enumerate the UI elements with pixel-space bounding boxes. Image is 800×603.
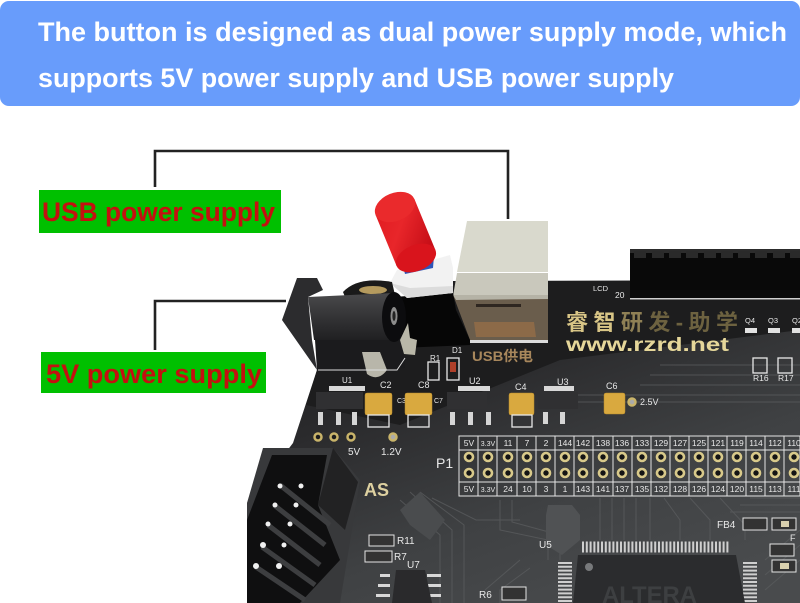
pin header table xyxy=(459,436,800,496)
AS connector label: AS xyxy=(364,480,389,500)
capacitor pads xyxy=(368,358,792,427)
pin numbers bottom: 124 xyxy=(711,484,725,494)
silkscreen labels: F xyxy=(790,533,796,543)
label: USB power supply xyxy=(39,190,281,233)
silkscreen labels: C6 xyxy=(606,381,618,391)
SMD resistors xyxy=(365,328,800,600)
silkscreen labels: LCD xyxy=(593,284,609,293)
pin holes xyxy=(465,453,798,477)
pin numbers top: 133 xyxy=(635,438,649,448)
pin numbers top: 5V xyxy=(464,438,475,448)
pin numbers top: 138 xyxy=(596,438,610,448)
label: USB power supply: USB power supply xyxy=(42,197,275,227)
button base xyxy=(390,255,453,298)
USB connector xyxy=(453,221,548,343)
circuit board photo xyxy=(247,186,800,603)
hatched copper areas xyxy=(546,505,580,555)
silkscreen labels: 1.2V xyxy=(381,447,402,458)
U7 IC xyxy=(376,570,441,603)
silkscreen labels: R11 xyxy=(397,536,415,547)
silkscreen labels: U1 xyxy=(342,376,353,385)
silkscreen labels: U3 xyxy=(557,377,569,387)
pin numbers top xyxy=(464,438,800,448)
copper traces xyxy=(400,365,800,603)
label: 5V power supply: 5V power supply xyxy=(46,359,262,389)
silkscreen labels: R6 xyxy=(479,590,492,601)
silkscreen labels: 2.5V xyxy=(640,397,659,407)
silkscreen labels: R1 xyxy=(430,354,441,363)
button stem xyxy=(403,256,434,274)
silkscreen labels: C7 xyxy=(434,398,443,405)
silkscreen labels: D1 xyxy=(452,346,463,355)
pin numbers top: 125 xyxy=(692,438,706,448)
pin numbers bottom: 3 xyxy=(544,484,549,494)
heading text: The button is designed as dual power supply mode, which xyxy=(38,17,787,47)
silkscreen labels: 20 xyxy=(615,290,625,300)
pin numbers top: 112 xyxy=(768,438,782,448)
pin numbers bottom: 126 xyxy=(692,484,706,494)
DC jack xyxy=(282,278,417,377)
pin numbers top: 3.3V xyxy=(481,441,496,448)
connector line: 5V xyxy=(155,301,286,350)
pin numbers top: 136 xyxy=(615,438,629,448)
LCD header connector xyxy=(630,249,800,300)
pin numbers top: 129 xyxy=(654,438,668,448)
silkscreen labels: C4 xyxy=(515,382,527,392)
silkscreen labels: U5 xyxy=(539,540,552,551)
silkscreen labels: C8 xyxy=(418,380,430,390)
pin numbers bottom: 115 xyxy=(749,484,763,494)
pin numbers bottom: 1 xyxy=(563,484,568,494)
silkscreen labels: P1 xyxy=(436,455,453,471)
pin numbers bottom: 143 xyxy=(576,484,590,494)
pin numbers bottom: 3.3V xyxy=(481,487,496,494)
pin numbers bottom: 141 xyxy=(596,484,610,494)
pin numbers bottom: 128 xyxy=(673,484,687,494)
silkscreen labels: 5V xyxy=(348,447,361,458)
pin numbers top: 144 xyxy=(558,438,572,448)
pin numbers top: 2 xyxy=(544,438,549,448)
pin numbers bottom: 113 xyxy=(768,484,782,494)
test points xyxy=(314,398,636,440)
logo Chinese text: 睿智研发-助学 xyxy=(566,310,738,335)
pin numbers bottom xyxy=(464,484,800,494)
pin numbers top: 119 xyxy=(730,438,744,448)
pin numbers top: 121 xyxy=(711,438,725,448)
button cap xyxy=(370,186,440,278)
IDC connector xyxy=(247,448,360,603)
silkscreen labels xyxy=(310,284,800,601)
silkscreen labels: FB4 xyxy=(717,520,736,531)
pin numbers top: 142 xyxy=(576,438,590,448)
silkscreen labels: U7 xyxy=(407,560,420,571)
label: 5V power supply xyxy=(41,352,266,393)
silkscreen labels: R17 xyxy=(778,373,794,383)
heading text: supports 5V power supply and USB power supply xyxy=(38,63,674,93)
pin numbers bottom: 137 xyxy=(615,484,629,494)
heading text xyxy=(38,17,787,93)
banner: heading panel xyxy=(0,1,800,106)
silkscreen labels: 3.3V xyxy=(310,447,331,458)
silkscreen labels: C2 xyxy=(380,380,392,390)
jack metal pins xyxy=(362,352,387,377)
silkscreen labels: R16 xyxy=(753,373,769,383)
connector pins xyxy=(256,485,330,600)
LED xyxy=(450,362,456,372)
silkscreen labels: Q3 xyxy=(768,316,778,325)
pin numbers top: 11 xyxy=(504,438,513,448)
silkscreen labels: Q4 xyxy=(745,316,755,325)
USB power silkscreen: USB供电 xyxy=(472,348,533,364)
pin numbers bottom: 10 xyxy=(522,484,532,494)
connector line: USB xyxy=(155,151,508,219)
logo block xyxy=(565,310,738,356)
push button xyxy=(370,186,453,298)
pin numbers bottom: 120 xyxy=(730,484,744,494)
silkscreen labels: C3 xyxy=(397,398,406,405)
pin numbers bottom: 5V xyxy=(464,484,475,494)
board base xyxy=(247,280,800,603)
pin numbers top: 114 xyxy=(749,438,763,448)
pin numbers bottom: 135 xyxy=(635,484,649,494)
regulators xyxy=(316,386,578,425)
pin numbers bottom: 132 xyxy=(654,484,668,494)
pin numbers top: 7 xyxy=(525,438,530,448)
QFP chip xyxy=(565,547,750,603)
shadow below button xyxy=(393,293,470,348)
pin numbers top: 127 xyxy=(673,438,687,448)
tantalum capacitors xyxy=(365,393,625,415)
silkscreen labels: U2 xyxy=(469,376,481,386)
silkscreen labels: R7 xyxy=(394,552,407,563)
logo url: www.rzrd.net xyxy=(565,335,730,356)
pin numbers bottom: 24 xyxy=(503,484,513,494)
